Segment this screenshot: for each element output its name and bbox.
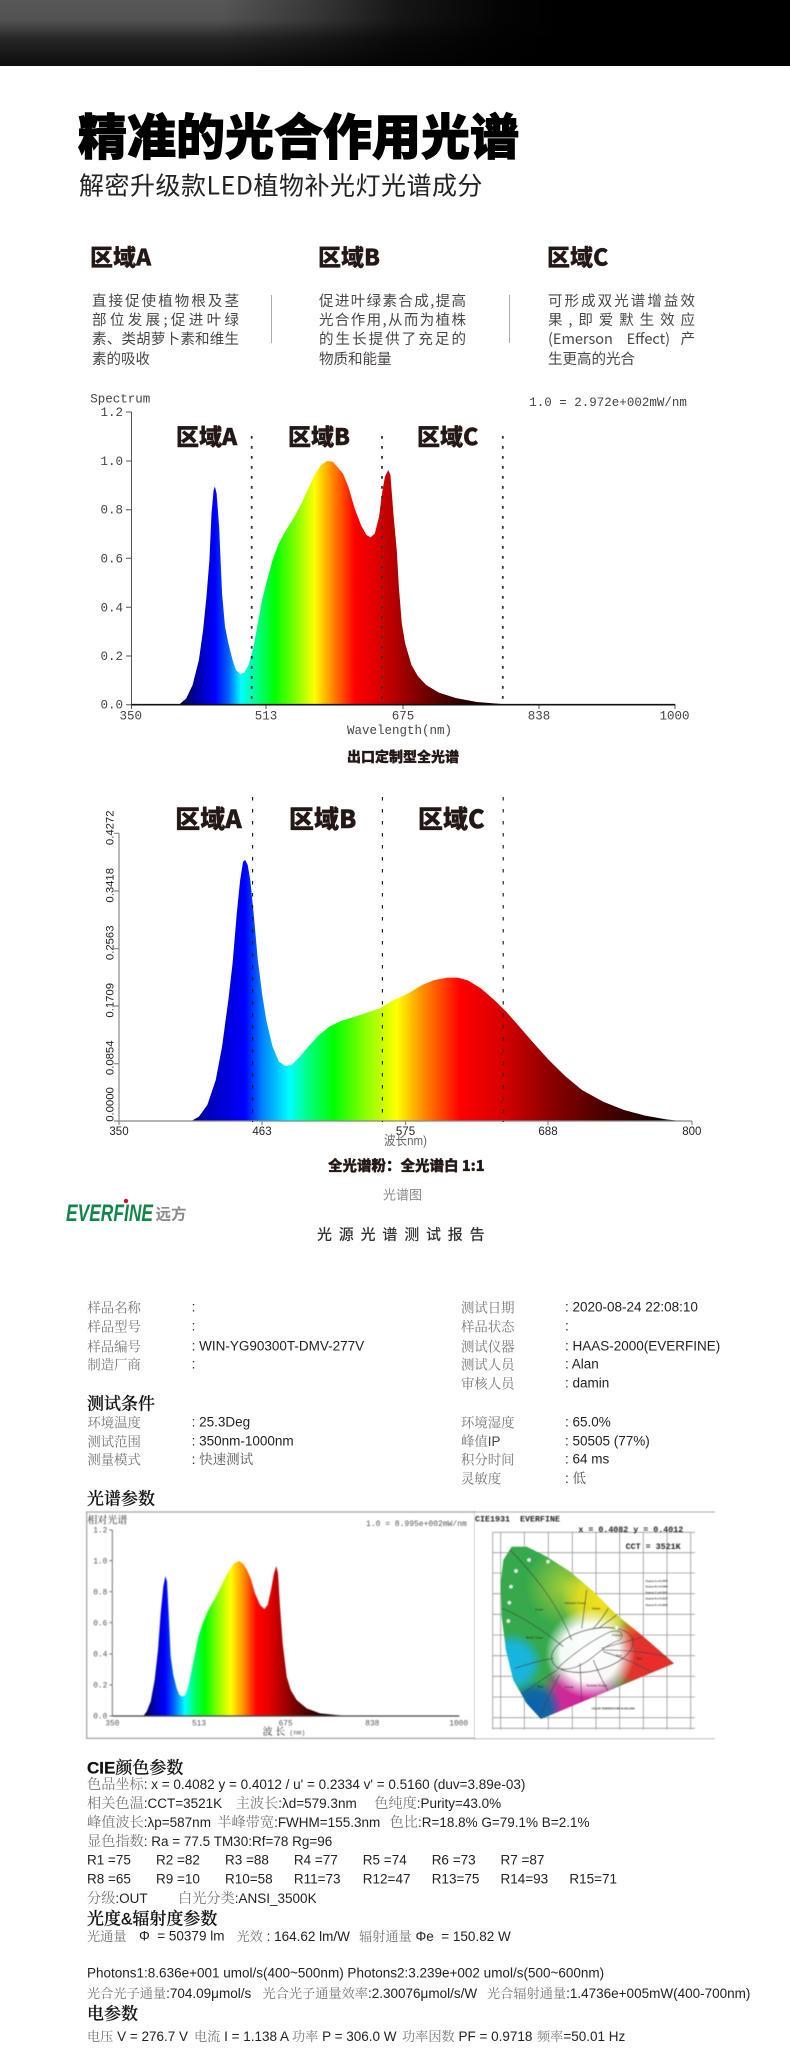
line: CCT: 相关色温:CCT=3521K bbox=[87, 1793, 222, 1813]
panel: test info table: 测试日期 bbox=[461, 1298, 515, 1317]
table: R values: R8 =65 bbox=[87, 1871, 131, 1886]
panel: test info table: : HAAS-2000(EVERFINE) bbox=[565, 1338, 720, 1353]
axes bbox=[114, 833, 692, 1125]
y axis labels: 1.0 bbox=[100, 455, 123, 469]
chart grid bbox=[493, 1532, 695, 1729]
axis labels bbox=[93, 1520, 468, 1728]
axis titles: Spectrum bbox=[90, 392, 150, 406]
legend block: Source C x=0.3101 bbox=[646, 1592, 668, 1595]
panel: test info table: 环境温度 bbox=[87, 1412, 141, 1431]
legend block: Source B x=0.3484 bbox=[646, 1586, 668, 1589]
table: R values: R12=47 bbox=[363, 1871, 410, 1886]
panel: test info table: : 低 bbox=[565, 1467, 586, 1487]
region names: Orange bbox=[612, 1633, 622, 1637]
axis labels: 350 bbox=[105, 1719, 120, 1728]
panel: test info table bbox=[87, 1298, 720, 1508]
gamut horseshoe bbox=[500, 1546, 674, 1720]
panel: test info table: 样品状态 bbox=[461, 1316, 515, 1335]
y axis labels: 0.6 bbox=[100, 552, 123, 566]
table: R values: R9 =10 bbox=[156, 1871, 200, 1886]
zone labels: 区域B bbox=[288, 418, 350, 452]
x axis labels: 350 bbox=[119, 710, 142, 724]
caption: spectrum figure: 光谱图 bbox=[383, 1184, 422, 1204]
axis labels: 0.6 bbox=[93, 1619, 108, 1628]
region names: Bluish Green bbox=[526, 1635, 544, 1639]
zone labels bbox=[176, 418, 478, 452]
x axis labels: 675 bbox=[392, 710, 414, 724]
line: electrical values bbox=[87, 2025, 625, 2044]
panel: test info table: : bbox=[192, 1318, 195, 1333]
x axis labels: 800 bbox=[682, 1126, 701, 1138]
text: zone B: 的生长提供了充足的 bbox=[319, 328, 466, 349]
panel frame bbox=[474, 1512, 715, 1739]
y axis bbox=[126, 412, 675, 709]
region names bbox=[526, 1601, 643, 1689]
region names: Yellow bbox=[592, 1606, 601, 1610]
y axis labels: 0.4272 bbox=[104, 811, 116, 845]
panel: test info table: 样品型号 bbox=[87, 1316, 141, 1335]
chart titles: 相对光谱 bbox=[87, 1511, 127, 1526]
diagram title and readings: CIE1931 EVERFINE bbox=[475, 1514, 560, 1524]
text: zone A: 部位发展;促进叶绿 bbox=[92, 309, 239, 330]
panel: CIE colour parameters: R1 =75 bbox=[87, 1852, 131, 1867]
x axis labels bbox=[109, 1126, 701, 1138]
region names: Purple bbox=[565, 1685, 574, 1689]
region names: Yellowish Green bbox=[564, 1601, 586, 1605]
heading: spectrum parameters: 光谱参数 bbox=[87, 1490, 155, 1508]
line: grade bbox=[87, 1887, 317, 1907]
axis labels: 0.8 bbox=[93, 1588, 108, 1597]
panel: test info table: : 快速测试 bbox=[192, 1448, 253, 1468]
axis labels: 0.4 bbox=[93, 1651, 108, 1660]
y axis labels: 0.2 bbox=[100, 650, 123, 664]
y axis labels bbox=[104, 811, 116, 1122]
table: R values: R10=58 bbox=[225, 1871, 273, 1886]
panel: test info table: : WIN-YG90300T-DMV-277V bbox=[192, 1338, 364, 1353]
line: photons: Photons1:8.636e+001 umol/s(400~500nm) Photons2:3.239e+002 umol/s(500~600nm) bbox=[87, 1966, 604, 1981]
panel: test info table: 灵敏度 bbox=[461, 1469, 501, 1488]
line: peak wavelength: 峰值波长:λp=587nm bbox=[87, 1812, 211, 1832]
panel: test info table: 测试人员 bbox=[461, 1354, 515, 1373]
y axis labels: 0.0854 bbox=[104, 1041, 116, 1075]
legend block: COLOR TEMPERATURE IN KELVINS bbox=[592, 1707, 635, 1710]
line: photosynthetic flux bbox=[87, 1982, 750, 2001]
panel: test info table: : 25.3Deg bbox=[192, 1414, 250, 1429]
line: electrical values: 功率因数 PF = 0.9718 bbox=[402, 2025, 532, 2044]
zone labels: 区域B bbox=[289, 800, 356, 836]
axis labels: 0.2 bbox=[93, 1682, 108, 1691]
white data dots bbox=[506, 1558, 618, 1629]
y axis labels: 0.2563 bbox=[104, 926, 116, 960]
zone labels: 区域C bbox=[417, 418, 478, 452]
chart: full spectrum powder 1:1 bbox=[104, 797, 701, 1148]
panel: CIE colour parameters: R5 =74 bbox=[363, 1852, 407, 1867]
panel: test info table: : damin bbox=[565, 1376, 609, 1391]
line: photosynthetic flux: 光合光子通量:704.09μmol/s bbox=[87, 1982, 251, 2001]
diagram title and readings bbox=[475, 1514, 683, 1552]
title: 精准的光合作用光谱 bbox=[78, 98, 519, 170]
axis labels: 513 bbox=[192, 1719, 206, 1728]
text: zone C: 果,即爱默生效应 bbox=[548, 309, 695, 330]
panel: test info table: 测量模式 bbox=[87, 1450, 141, 1469]
panel: CIE colour parameters: R4 =77 bbox=[294, 1852, 338, 1867]
line: grade: 分级:OUT bbox=[87, 1887, 148, 1907]
line: electrical values: 频率=50.01 Hz bbox=[537, 2025, 625, 2044]
zone labels: 区域A bbox=[176, 418, 238, 452]
zone labels: 区域A bbox=[175, 800, 242, 836]
panel: test info table: : bbox=[565, 1318, 569, 1333]
y axis labels: 0.0000 bbox=[104, 1087, 116, 1122]
panel: test info table: 测试范围 bbox=[87, 1431, 141, 1450]
diagram title and readings: x = 0.4082 y = 0.4012 bbox=[578, 1525, 683, 1535]
chart: export custom full spectrum bbox=[90, 392, 690, 738]
x axis labels: 575 bbox=[396, 1126, 415, 1138]
text: zone C: 可形成双光谱增益效 bbox=[548, 290, 695, 310]
table: R values: R14=93 bbox=[500, 1871, 548, 1886]
line: luminous flux: 光效 : 164.62 lm/W bbox=[236, 1925, 350, 1944]
axis labels: 675 bbox=[279, 1719, 293, 1728]
panel: test info table: : bbox=[192, 1356, 195, 1371]
line: photosynthetic flux: 光合光子通量效率:2.30076μmol/s/W bbox=[262, 1982, 477, 2001]
panel: CIE colour parameters: R7 =87 bbox=[500, 1852, 544, 1867]
x axis title: 波长nm) bbox=[384, 1133, 427, 1148]
panel: zone C description bbox=[547, 238, 695, 369]
panel frame bbox=[87, 1512, 475, 1738]
zone dividers bbox=[252, 436, 503, 702]
x axis labels: 688 bbox=[538, 1126, 558, 1138]
axis labels: 838 bbox=[365, 1719, 380, 1728]
panel: test info table: 制造厂商 bbox=[87, 1354, 141, 1373]
region names: Pink bbox=[616, 1654, 622, 1658]
legend block: Source A x=0.4476 bbox=[646, 1580, 668, 1583]
line: CCT: 色纯度:Purity=43.0% bbox=[374, 1793, 501, 1813]
text: zone A: 直接促使植物根及茎 bbox=[92, 290, 239, 310]
text: zone B bbox=[319, 290, 466, 369]
text: zone A: 素的吸收 bbox=[92, 348, 150, 369]
panel: CIE colour parameters: R2 =82 bbox=[156, 1852, 200, 1867]
axis titles bbox=[90, 392, 687, 738]
line: luminous flux: Φ = 50379 lm bbox=[139, 1928, 224, 1943]
heading: spectrum test report: 光源光谱测试报告 bbox=[317, 1224, 491, 1244]
panel: CIE colour parameters: R3 =88 bbox=[225, 1852, 269, 1867]
y axis labels: 0.3418 bbox=[104, 868, 116, 903]
panel: test info table: : 2020-08-24 22:08:10 bbox=[565, 1300, 698, 1315]
line: luminous flux: 光通量 bbox=[87, 1925, 127, 1944]
zone labels: 区域C bbox=[418, 800, 485, 836]
axis labels: 1.0 bbox=[93, 1557, 108, 1566]
x axis labels: 838 bbox=[528, 710, 550, 724]
text: zone B: 光合作用,从而为植株 bbox=[319, 309, 466, 330]
diagram title and readings: CCT = 3521K bbox=[626, 1542, 681, 1552]
line: peak wavelength: 色比:R=18.8% G=79.1% B=2.1% bbox=[390, 1812, 589, 1832]
panel: test info table: 样品名称 bbox=[87, 1298, 141, 1317]
heading: CIE colour parameters: CIE颜色参数 bbox=[87, 1758, 183, 1777]
zone labels bbox=[175, 800, 485, 836]
caption: export spectrum: 出口定制型全光谱 bbox=[347, 747, 459, 767]
panel: test info table: : 50505 (77%) bbox=[565, 1433, 650, 1448]
axes bbox=[109, 1530, 112, 1716]
logo: EVERFINE: EVERFINE bbox=[66, 1200, 154, 1227]
heading: electrical parameters: 电参数 bbox=[87, 2004, 138, 2024]
zone dividers bbox=[253, 797, 503, 1122]
x axis labels: 513 bbox=[255, 710, 277, 724]
heading: photometric parameters: 光度&辐射度参数 bbox=[87, 1910, 217, 1928]
legend block: Source D x=0.3127 bbox=[646, 1598, 668, 1601]
line: luminous flux: 辐射通量 Φe = 150.82 W bbox=[359, 1925, 511, 1944]
subtitle: 解密升级款LED植物补光灯光谱成分 bbox=[79, 166, 483, 202]
y axis labels bbox=[100, 406, 123, 713]
table: R values: R11=73 bbox=[294, 1871, 341, 1886]
x axis labels bbox=[119, 710, 690, 724]
y axis labels: 0.4 bbox=[100, 601, 123, 615]
x axis labels: 350 bbox=[109, 1126, 129, 1138]
line: CCT bbox=[87, 1793, 501, 1813]
legend block: Source E x=0.3333 bbox=[646, 1604, 668, 1607]
y axis labels: 0.0 bbox=[100, 699, 123, 713]
axis titles: 1.0 = 2.972e+002mW/nm bbox=[529, 396, 687, 410]
chart: relative spectrum: (nm) bbox=[289, 1728, 305, 1736]
x axis labels: 1000 bbox=[659, 710, 690, 724]
panel: test info table: : 65.0% bbox=[565, 1414, 611, 1429]
line: grade: 白光分类:ANSI_3500K bbox=[178, 1887, 317, 1907]
panel: test info table: 峰值IP bbox=[461, 1430, 500, 1449]
text: zone C bbox=[548, 290, 695, 369]
line: peak wavelength bbox=[87, 1812, 589, 1832]
spectrum curve bbox=[143, 1561, 357, 1716]
spectrum curve bbox=[191, 860, 681, 1121]
heading: zone A: 区域A bbox=[90, 238, 151, 272]
panel: CIE colour parameters bbox=[87, 1758, 617, 1907]
line: photosynthetic flux: 光合辐射通量:1.4736e+005mW(400-700nm) bbox=[487, 1982, 750, 2001]
line: chromaticity: 色品坐标: x = 0.4082 y = 0.4012 / u' = 0.2334 v' = 0.5160 (duv=3.89e-03) bbox=[87, 1774, 525, 1794]
line: electrical values: 电流 I = 1.138 A bbox=[194, 2025, 289, 2044]
panel: test info table: 测试仪器 bbox=[461, 1336, 515, 1355]
y axis labels: 0.8 bbox=[100, 504, 123, 518]
spectrum curve bbox=[179, 461, 512, 705]
panel: test info table: 环境湿度 bbox=[461, 1412, 515, 1431]
axis labels: 1.0 = 8.995e+002mW/nm bbox=[366, 1520, 467, 1529]
panel: test info table: 审核人员 bbox=[461, 1374, 515, 1393]
text: zone A bbox=[92, 290, 239, 369]
panel: CIE colour parameters: R6 =73 bbox=[432, 1852, 476, 1867]
line: luminous flux bbox=[87, 1925, 511, 1944]
text: zone B: 促进叶绿素合成,提高 bbox=[319, 290, 466, 310]
panel: electrical parameters bbox=[87, 2004, 625, 2044]
heading: zone C: 区域C bbox=[547, 238, 608, 272]
region names: Green bbox=[535, 1608, 544, 1612]
panel: test info table: 积分时间 bbox=[461, 1450, 515, 1469]
axis titles: Wavelength(nm) bbox=[347, 724, 452, 738]
panel: test info table: : Alan bbox=[565, 1356, 599, 1371]
line: colour rendering: 显色指数: Ra = 77.5 TM30:Rf=78 Rg=96 bbox=[87, 1831, 332, 1851]
chart: relative spectrum: 波 长 bbox=[263, 1723, 285, 1738]
header gradient bar bbox=[0, 0, 790, 66]
text: zone C: (Emerson Effect)产 bbox=[548, 328, 695, 349]
axis labels: 1000 bbox=[449, 1719, 468, 1728]
panel: test info table: : 64 ms bbox=[565, 1452, 609, 1467]
chart: CIE1931 chromaticity diagram bbox=[474, 1511, 716, 1740]
text: zone C: 生更高的光合 bbox=[548, 348, 635, 369]
line: CCT: 主波长:λd=579.3nm bbox=[236, 1793, 357, 1813]
panel: zone B description bbox=[318, 238, 466, 369]
y axis labels: 1.2 bbox=[100, 406, 123, 420]
region names: Reddish Purple bbox=[587, 1684, 608, 1688]
legend block bbox=[592, 1580, 668, 1710]
heading: test conditions: 测试条件 bbox=[87, 1394, 155, 1414]
heading: zone B: 区域B bbox=[318, 238, 380, 272]
chart: relative spectrum bbox=[86, 1510, 476, 1740]
caption: full spectrum ratio: 全光谱粉：全光谱白 1:1 bbox=[328, 1155, 485, 1176]
panel: test info table: 样品编号 bbox=[87, 1336, 141, 1355]
table: R values bbox=[87, 1852, 617, 1886]
y axis labels: 0.1709 bbox=[104, 983, 116, 1018]
table: R values: R15=71 bbox=[569, 1871, 617, 1886]
panel: test info table: : bbox=[192, 1300, 195, 1315]
line: electrical values: 功率 P = 306.0 W bbox=[292, 2025, 397, 2044]
region names: Blue bbox=[537, 1684, 544, 1688]
panel: test info table: : 350nm-1000nm bbox=[192, 1433, 294, 1448]
region names: Red bbox=[637, 1656, 643, 1660]
axis labels: 1.2 bbox=[93, 1527, 108, 1536]
axis labels: 0.0 bbox=[93, 1713, 108, 1722]
region lines bbox=[502, 1550, 667, 1717]
text: zone A: 素、类胡萝卜素和维生 bbox=[92, 328, 239, 349]
panel: photometric and radiometric parameters bbox=[87, 1910, 750, 2001]
line: peak wavelength: 半峰带宽:FWHM=155.3nm bbox=[217, 1812, 380, 1832]
line: electrical values: 电压 V = 276.7 V bbox=[87, 2025, 188, 2044]
x axis labels: 463 bbox=[252, 1126, 272, 1138]
logo: EVERFINE: 远方 bbox=[156, 1202, 187, 1224]
text: zone B: 物质和能量 bbox=[319, 348, 392, 369]
panel: zone A description bbox=[90, 238, 239, 369]
table: R values: R13=75 bbox=[432, 1871, 479, 1886]
